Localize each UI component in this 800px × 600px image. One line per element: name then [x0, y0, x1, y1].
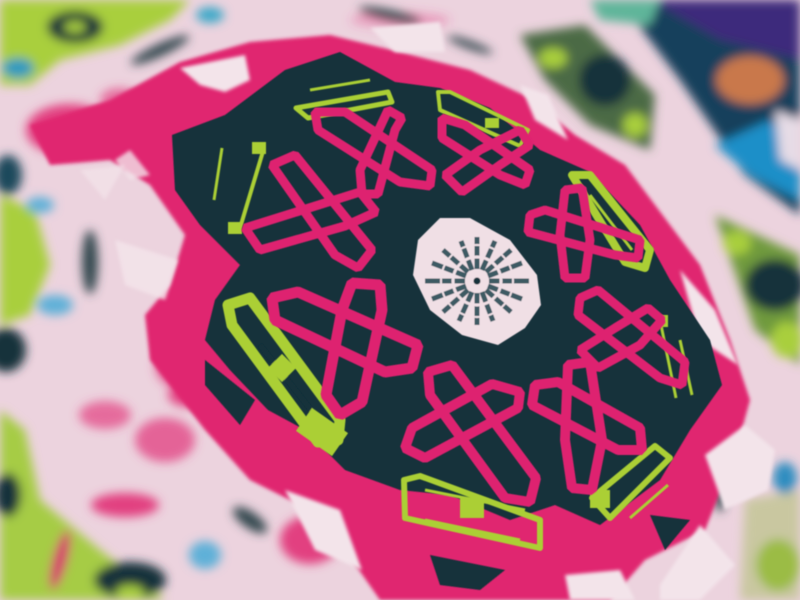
left and lower pink scatter — [26, 12, 450, 564]
dark teal centre field — [172, 52, 722, 590]
cross: bottom — [405, 365, 536, 502]
bottom-left lime and dark — [0, 410, 221, 600]
top-right colourful corner — [590, 0, 800, 215]
lime ring motifs — [214, 80, 692, 548]
medallion: centre dot — [474, 278, 480, 284]
lime ring: right — [658, 315, 692, 398]
cross: lower right — [532, 362, 642, 490]
lime ring: top — [296, 80, 392, 118]
lime ring: bottom — [404, 476, 540, 548]
medallion: octagon — [413, 218, 541, 345]
white fleck cluster: right — [565, 270, 775, 600]
upper-right lime and dark rings — [520, 25, 655, 150]
cross: upper right — [528, 188, 640, 278]
white fleck cluster: lower left — [285, 490, 362, 570]
lime ring: upper right — [572, 175, 650, 268]
lime ring: upper left — [214, 142, 266, 234]
right edge lime and dark — [715, 215, 800, 365]
cross: top centre — [315, 110, 432, 194]
white fleck cluster: top — [370, 22, 568, 140]
white fleck cluster: top left — [115, 55, 250, 180]
central white medallion — [413, 218, 541, 345]
cross: top right — [442, 118, 530, 192]
medallion: lattice — [425, 237, 529, 325]
cross: left large — [272, 283, 418, 415]
white fleck cluster: left — [80, 165, 178, 300]
cross: upper left — [245, 155, 376, 268]
cross: right — [578, 290, 685, 385]
left edge lime and dark — [0, 155, 73, 372]
right-bottom corner — [740, 462, 800, 600]
lime ring: top right — [438, 92, 528, 146]
dark streak clusters — [82, 3, 726, 538]
pink cross motifs — [245, 110, 685, 502]
top-left lime corner — [0, 0, 224, 85]
lime ring: lower right — [590, 446, 670, 518]
lime ring: lower left — [228, 298, 348, 456]
